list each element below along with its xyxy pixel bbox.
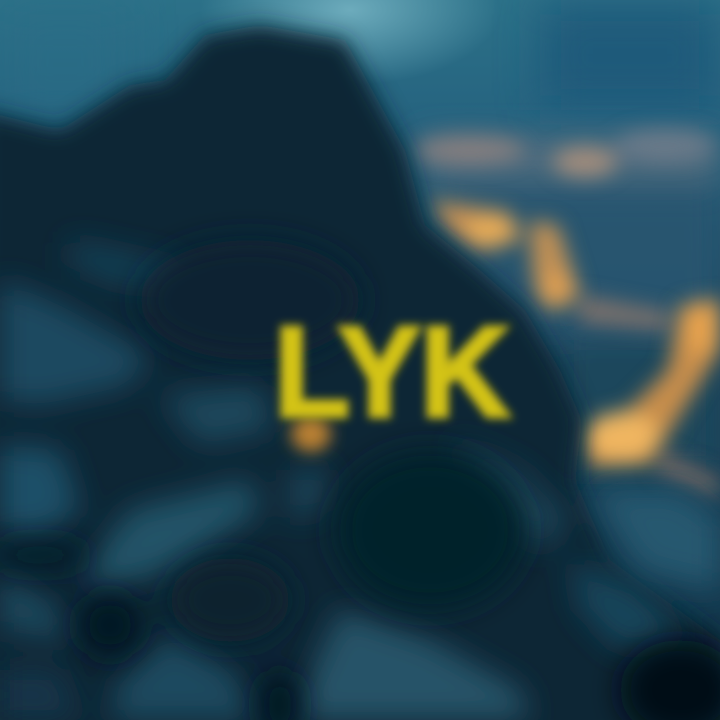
title: LYK blurred yellow lettering: LYK	[274, 301, 510, 444]
city lights	[415, 129, 720, 498]
orange reflection under the lettering	[291, 416, 331, 452]
rock field	[0, 240, 720, 720]
distant city haze	[420, 135, 720, 470]
